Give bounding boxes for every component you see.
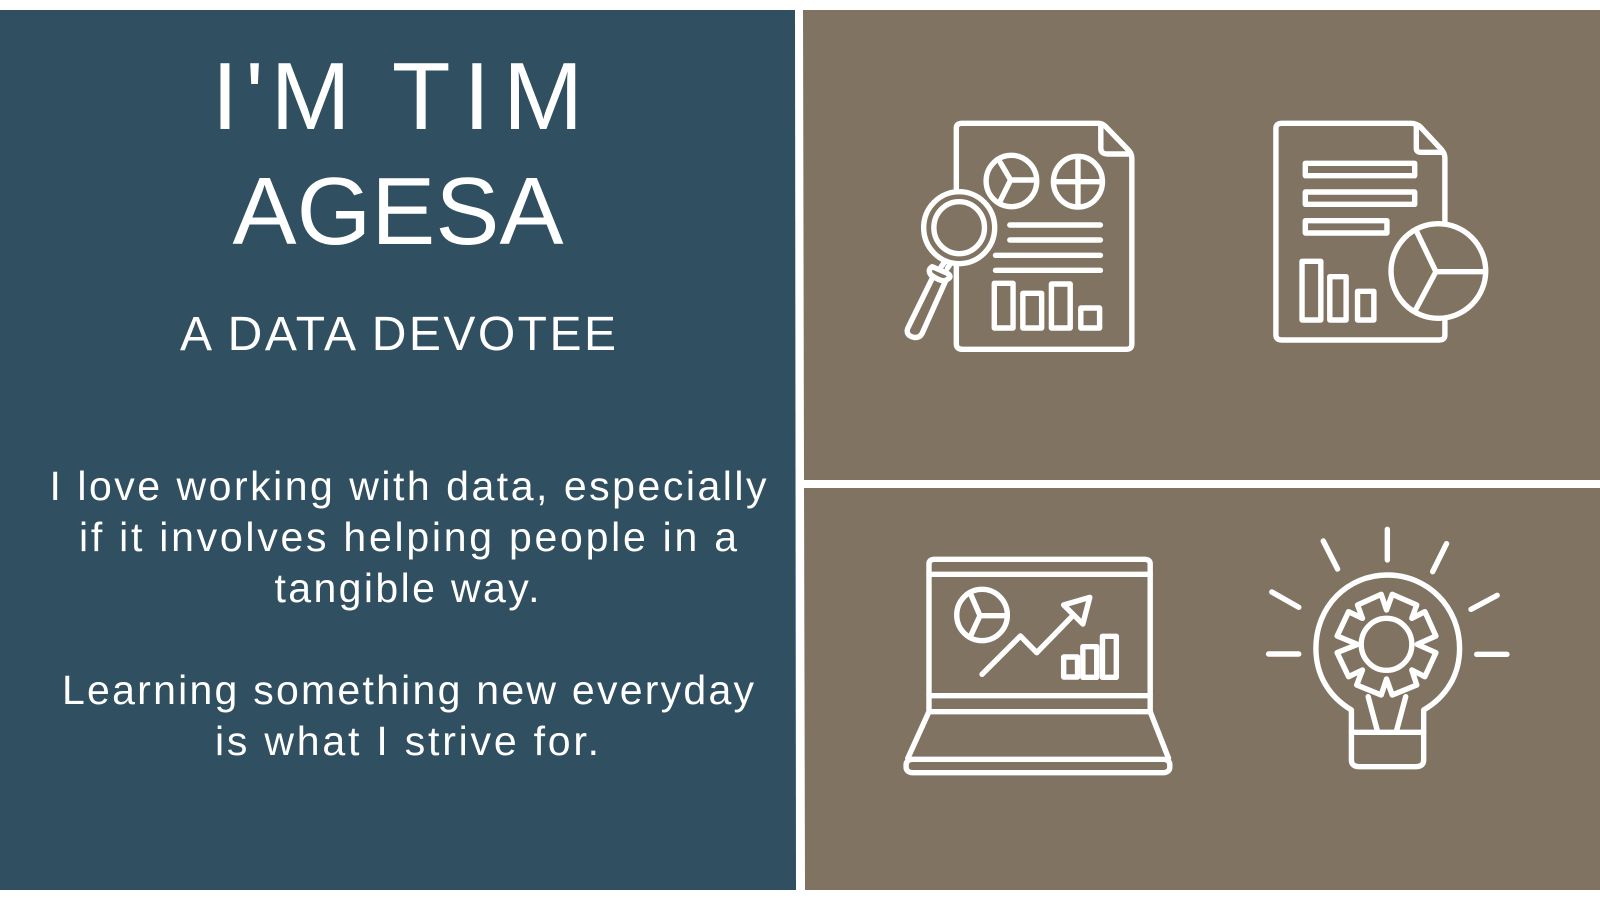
title: TIM bbox=[392, 43, 596, 150]
icon: laptop with charts bbox=[906, 559, 1170, 773]
text block: learning: is what I strive for. bbox=[215, 718, 599, 764]
text block: love of data: I love working with data, especially bbox=[50, 463, 767, 509]
title: I'M bbox=[212, 43, 358, 150]
title bbox=[212, 43, 596, 265]
title: AGESA bbox=[232, 158, 564, 265]
icon: light bulb with gear bbox=[1269, 529, 1507, 767]
panel: bottom icons bbox=[804, 488, 1600, 890]
text block: learning: Learning something new everyday bbox=[62, 667, 754, 713]
panel: profile bbox=[0, 10, 796, 890]
text block: learning bbox=[62, 667, 754, 764]
text block: love of data bbox=[50, 463, 767, 611]
panel: top icons bbox=[803, 10, 1600, 480]
subtitle: A DATA DEVOTEE bbox=[180, 308, 616, 361]
text block: love of data: if it involves helping people in a bbox=[79, 514, 737, 560]
icon: report with pie chart bbox=[1276, 123, 1486, 340]
text block: love of data: tangible way. bbox=[274, 565, 540, 611]
icon: report with magnifier bbox=[907, 123, 1132, 349]
